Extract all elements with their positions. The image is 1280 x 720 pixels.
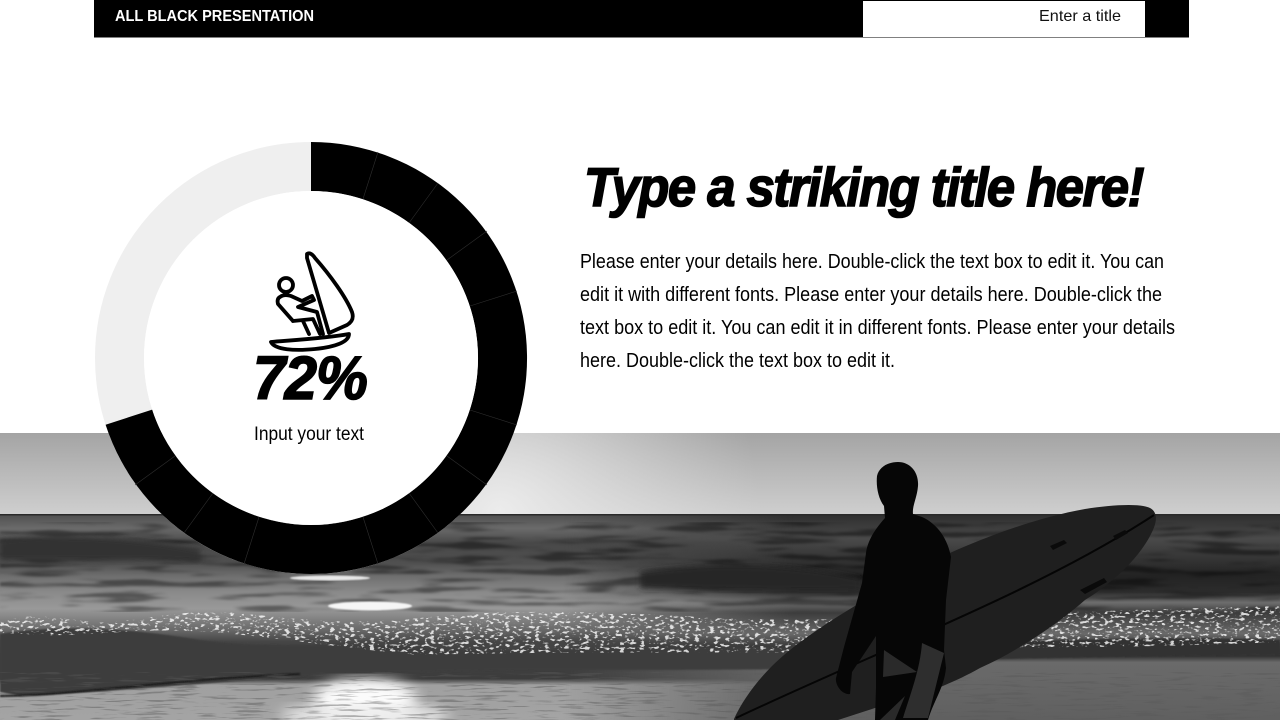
photo sky bbox=[0, 433, 1280, 515]
near wave bbox=[0, 628, 860, 696]
sun reflections bbox=[328, 602, 412, 610]
donut value 72%: 72% bbox=[253, 344, 367, 412]
body text block: edit it with different fonts. Please enter your details here. Double-click the bbox=[580, 284, 1162, 306]
donut value arc bbox=[106, 142, 527, 574]
surfer silhouette bbox=[836, 462, 951, 720]
icon: windsurfer bbox=[271, 253, 353, 350]
photo sea bbox=[0, 514, 1280, 720]
donut caption: Input your text bbox=[254, 424, 365, 445]
surfboard bbox=[734, 505, 1156, 720]
donut inner circle bbox=[144, 191, 478, 525]
header title: ALL BLACK PRESENTATION bbox=[115, 8, 314, 25]
heading: Type a striking title here! bbox=[584, 156, 1144, 218]
body text block: here. Double-click the text box to edit it. bbox=[580, 350, 895, 372]
donut track bbox=[120, 166, 502, 550]
body text block: Please enter your details here. Double-click the text box to edit it. You can bbox=[580, 251, 1164, 273]
background photo: surfer on beach bbox=[0, 433, 1280, 720]
wave foam bbox=[0, 606, 1280, 655]
body text block bbox=[580, 251, 1175, 372]
body text block: text box to edit it. You can edit it in different fonts. Please enter your details bbox=[580, 317, 1175, 339]
header title box bbox=[863, 1, 1145, 37]
header bar bbox=[94, 0, 1189, 38]
sand texture bbox=[0, 672, 751, 720]
header title box: Enter a title bbox=[1039, 8, 1121, 25]
donut chart: 72% bbox=[106, 142, 527, 574]
